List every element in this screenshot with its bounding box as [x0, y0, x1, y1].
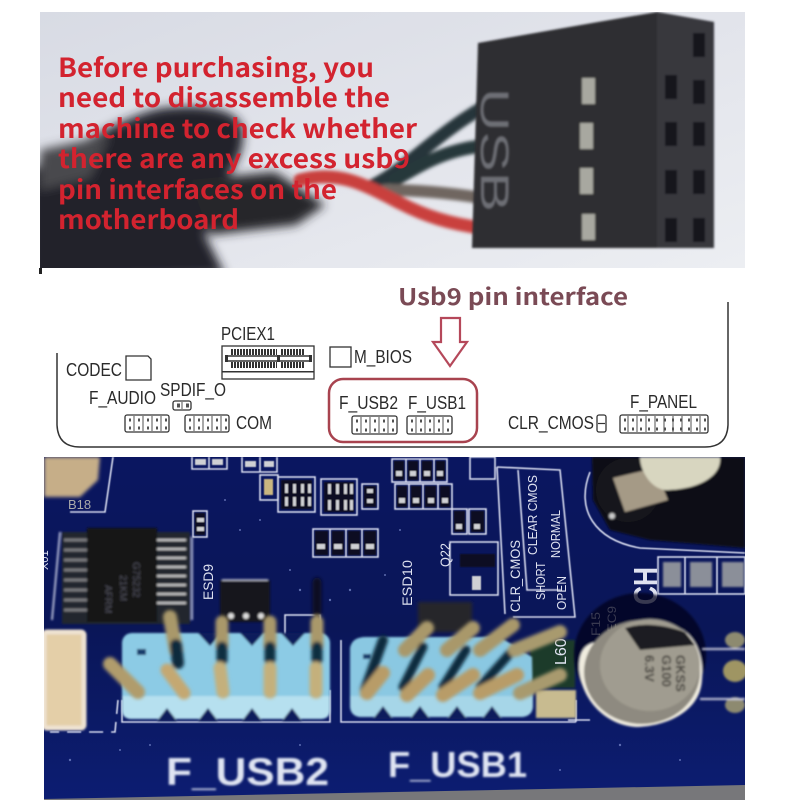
component silkscreen text: L60: [553, 638, 570, 665]
top-left white connector: [44, 457, 100, 497]
component silkscreen text: CLEAR CMOS: [525, 475, 540, 555]
round electrolytic capacitor: GKSS: [673, 655, 688, 692]
small chips near ESD10: [418, 602, 472, 632]
IC chip: 21KM: [117, 575, 128, 601]
connector USB lettering: USB: [472, 88, 516, 212]
USB2 header: [122, 633, 330, 721]
IC chip: G75232: [130, 562, 141, 598]
instruction text: Before purchasing, you: [58, 48, 374, 85]
USB1 header: [350, 637, 533, 719]
bottom board edge: [44, 785, 745, 800]
component silkscreen text: ESD9: [200, 564, 216, 600]
round electrolytic capacitor: G100: [659, 655, 674, 687]
IC chip: AFRM: [102, 585, 113, 613]
component labels: [66, 323, 697, 434]
instruction text: machine to check whether: [58, 109, 418, 146]
connector pin holes: [580, 78, 595, 240]
component silkscreen text: X01: [39, 550, 51, 570]
component labels: CODEC: [66, 359, 122, 380]
component silkscreen text: F15: [589, 612, 603, 636]
component silkscreen text: ESD10: [399, 560, 415, 606]
connector housing: [472, 12, 714, 248]
silkscreen outlines: [50, 457, 745, 732]
component silkscreen text: SHORT: [533, 562, 548, 600]
component silkscreen text: IEC9: [605, 606, 619, 636]
round electrolytic capacitor: [574, 593, 706, 727]
gold pads: [536, 690, 576, 718]
board label F_USB1: F_USB1: [388, 744, 527, 785]
component silkscreen text: B18: [68, 497, 91, 512]
blurred cable plug: [30, 107, 325, 280]
instruction text: need to disassemble the: [58, 78, 390, 115]
round electrolytic capacitor: 6.3V: [642, 655, 657, 682]
board speckle: [69, 499, 681, 771]
arrow: [433, 318, 467, 366]
component silkscreen text: NORMAL: [548, 510, 563, 558]
heatsink capacitor: [592, 457, 745, 548]
highlight box: [329, 379, 477, 442]
instruction text: pin interfaces on the: [58, 170, 337, 207]
solder pads right: [700, 632, 747, 713]
component labels: COM: [236, 412, 272, 433]
instruction text: [58, 48, 418, 237]
component silkscreen text: CLR_CMOS: [507, 540, 523, 612]
component labels: PCIEX1: [221, 323, 275, 344]
codec and bios chips: [126, 356, 151, 380]
instruction text: there are any excess usb9: [58, 139, 410, 176]
small SMD pads: [195, 459, 495, 590]
USB2 pins: [110, 582, 317, 693]
component labels: F_USB1: [408, 392, 466, 414]
pin headers: [125, 401, 708, 434]
IC chip: [52, 528, 192, 624]
small transistor chip: [220, 580, 270, 622]
component silkscreen text: [39, 475, 664, 665]
board label F_USB2: F_USB2: [166, 751, 329, 794]
USB1 pins: [365, 625, 560, 695]
component labels: F_AUDIO: [89, 387, 156, 409]
component labels: SPDIF_O: [160, 379, 226, 401]
PCIe x1 slot: [222, 346, 314, 379]
component silkscreen text: Q22: [437, 543, 453, 567]
small right-side components: [663, 562, 744, 587]
panel: motherboard layout diagram: [57, 278, 728, 447]
panel: USB connector photo: [30, 12, 745, 280]
component silkscreen text: CH: [627, 567, 664, 605]
instruction text: motherboard: [58, 200, 239, 237]
component silkscreen text: OPEN: [554, 576, 569, 610]
component labels: CLR_CMOS: [508, 412, 594, 434]
heading: Usb9 pin interface: Usb9 pin interface: [398, 278, 628, 312]
component labels: F_USB2: [339, 392, 398, 414]
cable wires: [300, 108, 482, 228]
component labels: M_BIOS: [354, 346, 412, 368]
panel: motherboard photo: [39, 457, 747, 800]
left cream connector: [44, 632, 84, 728]
component labels: F_PANEL: [630, 391, 697, 413]
